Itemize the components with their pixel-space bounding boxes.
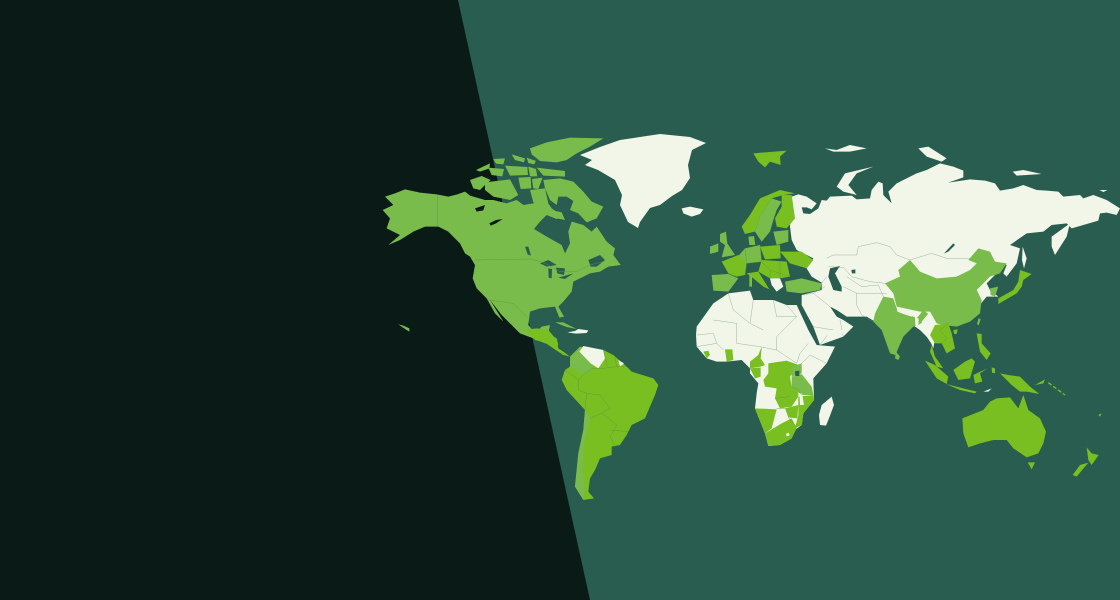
Yemen (817, 330, 850, 338)
Asian and European borders (728, 243, 970, 345)
Nepal (897, 307, 913, 317)
lakes: Great Bear and Great Slave (475, 205, 503, 226)
North America (383, 138, 621, 345)
Ukraine (780, 252, 813, 268)
Democratic Republic of Congo (763, 361, 798, 408)
United Kingdom (720, 232, 735, 257)
African borders (697, 293, 827, 427)
Central America (522, 328, 570, 357)
Indochina borders (940, 323, 948, 343)
Hainan (953, 329, 958, 334)
Namibia (755, 408, 777, 433)
Moluccas (992, 367, 995, 373)
South Korea (990, 287, 998, 297)
Myanmar (922, 312, 935, 347)
Tanzania (792, 374, 813, 395)
Svalbard (753, 151, 787, 167)
Malawi (799, 393, 804, 405)
Ireland (710, 243, 718, 254)
New Britain (1035, 379, 1045, 385)
Tasmania (1028, 462, 1035, 469)
Zimbabwe (785, 405, 798, 418)
Baltic states (773, 230, 788, 245)
Bangladesh (915, 317, 919, 327)
background: dark diagonal panel (0, 0, 590, 600)
Spain and Portugal (712, 274, 738, 292)
Eurasia landmass (790, 163, 1120, 348)
Germany (738, 245, 762, 263)
New Zealand North Island (1087, 447, 1099, 465)
Sardinia (749, 275, 752, 287)
China (885, 248, 1007, 327)
South America (562, 347, 658, 500)
Timor (983, 388, 992, 392)
Italy (747, 272, 769, 289)
Solomon Islands (1048, 383, 1065, 395)
Japan (998, 270, 1032, 304)
Hawaii (398, 324, 409, 332)
Cuba (555, 322, 577, 329)
Balkans (770, 278, 783, 292)
South America and Africa (522, 291, 850, 500)
Philippines (977, 333, 991, 360)
New Guinea (1000, 373, 1039, 394)
Iceland (682, 207, 703, 217)
Southeast Asia and Oceania (895, 312, 1102, 477)
Liberia (703, 351, 710, 358)
France (722, 255, 747, 277)
India (873, 297, 932, 355)
Sulawesi (973, 368, 987, 383)
Kamchatka, Sakhalin and Arctic islands (825, 145, 1107, 268)
Turkey (785, 278, 822, 293)
Thailand Laos Cambodia Vietnam (930, 323, 955, 353)
Finland (775, 195, 795, 228)
Fiji (1098, 413, 1102, 417)
Greenland (580, 134, 706, 228)
Mozambique (795, 395, 814, 428)
Eurasia (682, 145, 1120, 355)
Sumatra (925, 361, 948, 384)
mainland North America (383, 189, 621, 345)
Chile (575, 410, 590, 500)
Madagascar (819, 397, 834, 426)
Java and Lesser Sunda (946, 384, 977, 393)
French Guiana (618, 360, 624, 367)
Gabon (750, 367, 761, 378)
Denmark (748, 236, 755, 245)
Venezuela (579, 346, 605, 368)
US borders (438, 194, 603, 318)
Taiwan (977, 318, 981, 325)
Australia (962, 395, 1046, 457)
Norway (742, 190, 795, 234)
Central and Eastern Europe (758, 260, 790, 278)
Ghana (725, 349, 733, 362)
Malay Peninsula (930, 345, 943, 368)
Borneo (953, 358, 975, 380)
Canadian Arctic islands (470, 138, 603, 222)
Lake Victoria (795, 371, 799, 376)
New Zealand South Island (1073, 463, 1088, 477)
Africa (696, 291, 835, 446)
Poland (760, 245, 781, 259)
South Africa (765, 418, 797, 446)
world map (383, 134, 1120, 500)
Sweden (755, 198, 782, 242)
South American borders (565, 350, 628, 447)
Lesotho (786, 433, 790, 436)
Sri Lanka (895, 352, 900, 360)
Cameroon (750, 347, 765, 368)
Hispaniola and Puerto Rico (567, 329, 588, 334)
lakes: Winnipeg and Great Lakes (525, 247, 605, 279)
Caspian Sea, Aral Sea, Lake Baikal (828, 243, 955, 292)
Uganda (792, 363, 802, 377)
Colombia (570, 347, 592, 375)
